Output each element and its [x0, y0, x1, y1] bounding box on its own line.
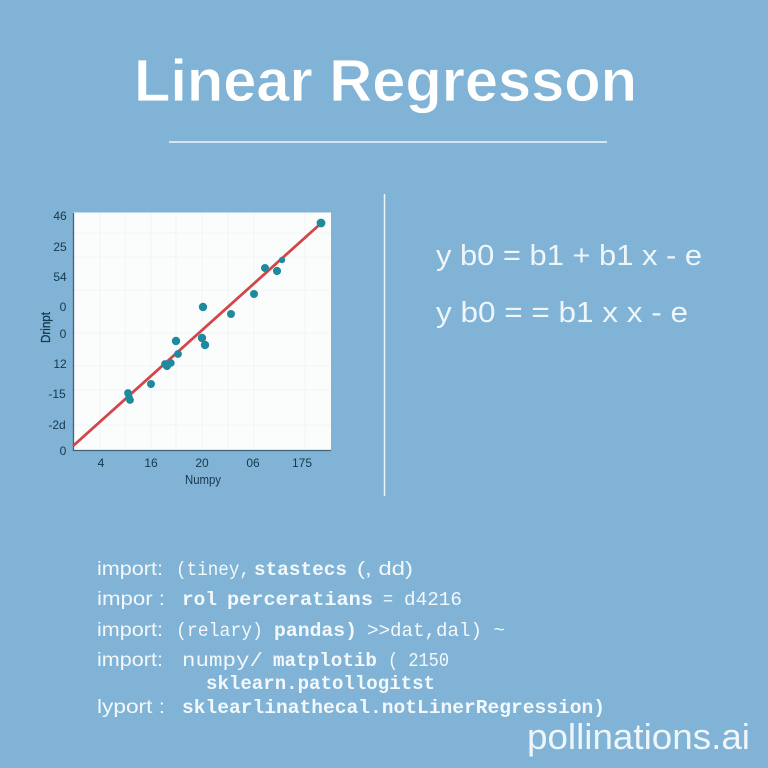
- code line 1: stastecs: [254, 559, 347, 581]
- x-axis tick labels: 06: [246, 456, 260, 470]
- watermark: pollinations.ai: [527, 716, 750, 757]
- title: Linear Regresson: [134, 48, 637, 114]
- code line 2: [97, 589, 462, 611]
- code line 3: (relary): [176, 620, 263, 642]
- code line 3: pandas): [274, 620, 357, 642]
- divider: [384, 194, 386, 496]
- y-axis tick labels: [48, 209, 67, 458]
- y-axis tick labels: 54: [53, 270, 67, 284]
- code line 1: (, dd): [357, 559, 413, 580]
- code line 6: sklearlinathecal.notLinerRegression): [182, 697, 605, 719]
- code line 2: =: [383, 589, 393, 610]
- plot area: [74, 212, 331, 450]
- code line 1: import:: [97, 559, 163, 580]
- x-axis tick labels: 175: [292, 456, 312, 470]
- axes: [74, 213, 331, 450]
- code line 4: ( 2150: [388, 650, 449, 672]
- code line 4: [97, 650, 449, 672]
- code line 4: numpy/: [182, 650, 263, 672]
- code line 2: perceratians: [227, 589, 373, 611]
- code line 4: matplotib: [273, 650, 377, 672]
- x-axis tick labels: 20: [195, 456, 209, 470]
- x-axis label: Numpy: [185, 472, 221, 487]
- y-axis label: Drinpt: [38, 312, 53, 343]
- regression line: [73, 226, 318, 446]
- y-axis tick labels: 0: [60, 300, 67, 314]
- code line 3: [97, 620, 505, 642]
- chart: scatter plot with regression line: [38, 209, 331, 487]
- equation 1: y b0 = b1 + b1 x - e: [436, 240, 702, 272]
- x-axis tick labels: 16: [144, 456, 158, 470]
- code line 1: [97, 559, 413, 581]
- y-axis tick labels: 12: [53, 357, 67, 371]
- code line 2: d4216: [404, 589, 462, 611]
- equation 2: y b0 = = b1 x x - e: [436, 297, 688, 329]
- code line 2: rol: [182, 589, 217, 611]
- code line 5: sklearn.patollogitst: [206, 673, 435, 695]
- y-axis tick labels: -2d: [48, 418, 66, 432]
- code line 2: impor :: [97, 589, 165, 610]
- code line 4: import:: [97, 650, 163, 671]
- code line 6: lyport :: [97, 697, 165, 718]
- y-axis tick labels: 0: [60, 444, 67, 458]
- y-axis tick labels: 46: [53, 209, 67, 223]
- code line 3: >>dat,dal) ~: [367, 620, 505, 642]
- x-axis tick labels: 4: [98, 456, 105, 470]
- y-axis tick labels: 25: [53, 240, 67, 254]
- code line 3: import:: [97, 620, 163, 641]
- code line 1: (tiney,: [176, 559, 250, 581]
- x-axis tick labels: [98, 456, 312, 470]
- data points: [124, 219, 325, 404]
- y-axis tick labels: -15: [48, 387, 66, 401]
- y-axis tick labels: 0: [60, 327, 67, 341]
- code block: [97, 559, 605, 719]
